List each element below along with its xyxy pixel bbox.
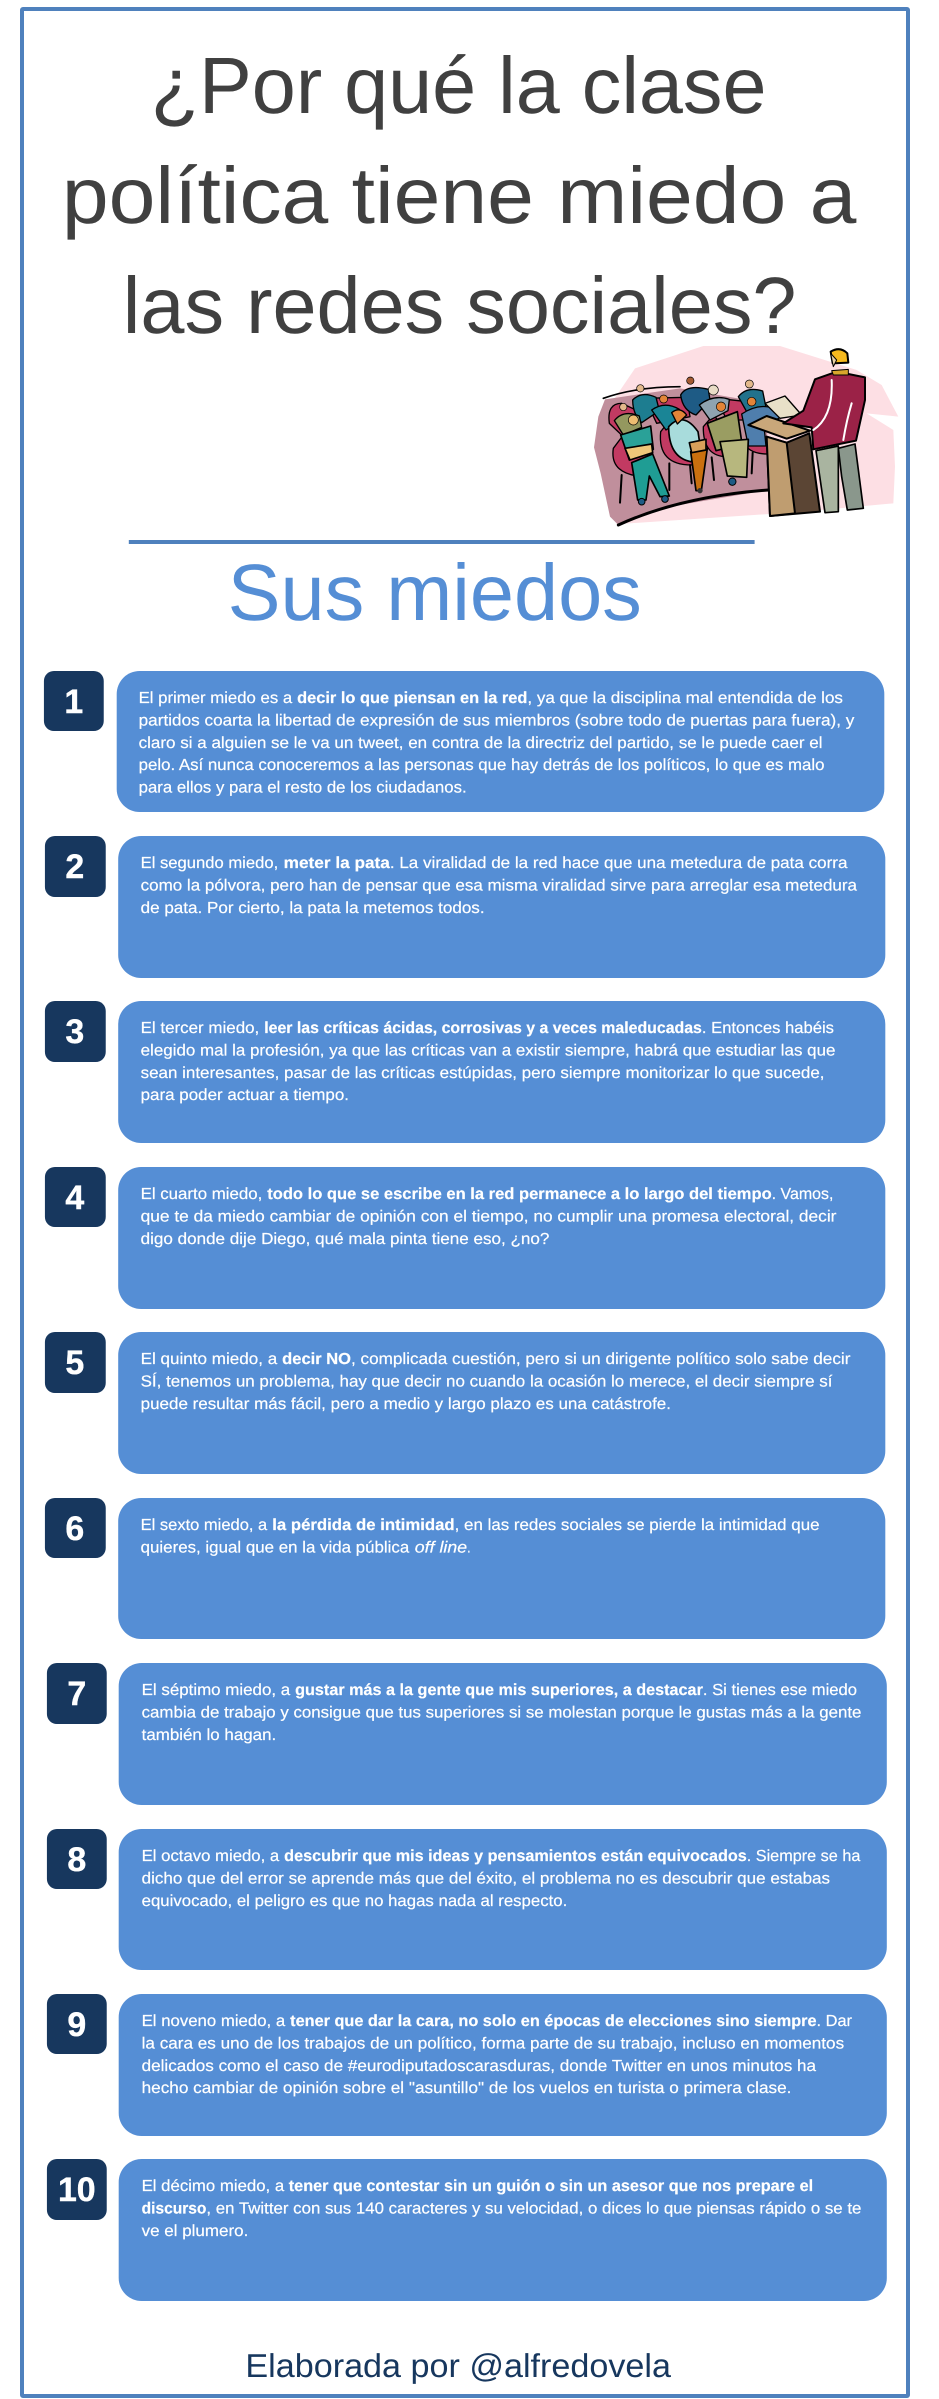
badge 1	[44, 671, 104, 731]
card 7: cambia de trabajo y consigue que tus superiores si se molestan porque le gustas más a la gente	[142, 1704, 861, 1721]
badge 10	[47, 2159, 107, 2220]
card 9: delicados como el caso de #eurodiputadoscarasduras, donde Twitter en unos minutos ha	[142, 2058, 816, 2075]
card 10: , en Twitter con sus 140 caracteres y su velocidad, o dices lo que piensas rápido o se te	[206, 2200, 861, 2217]
badge 5: 5	[65, 1344, 84, 1382]
card 6: off line	[415, 1539, 467, 1556]
badge 8: 8	[67, 1841, 86, 1879]
card 9	[119, 1994, 887, 2136]
card 10: El décimo miedo, a	[142, 2178, 284, 2195]
heading: Sus miedos: Sus miedos	[228, 548, 642, 637]
lectern	[748, 416, 820, 516]
card 6: la pérdida de intimidad	[272, 1517, 455, 1534]
speaker	[783, 349, 865, 513]
card 2: . La viralidad de la red hace que una metedura de pata corra	[390, 855, 848, 872]
title: las redes sociales?	[123, 261, 797, 350]
card 3: para poder actuar a tiempo.	[141, 1087, 349, 1104]
card 7: gustar más a la gente que mis superiores, a destacar	[295, 1682, 703, 1699]
card 4: todo lo que se escribe en la red permanece a lo largo del tiempo	[267, 1186, 772, 1203]
footer credit: Elaborada por @alfredovela	[245, 2347, 672, 2384]
card 2: de pata. Por cierto, la pata la metemos todos.	[141, 900, 485, 917]
card 7: . Si tienes ese miedo	[703, 1682, 857, 1699]
card 1: , ya que la disciplina mal entendida de los	[527, 690, 843, 707]
card 8: El octavo miedo, a	[142, 1848, 279, 1865]
card 1: para ellos y para el resto de los ciudadanos.	[139, 780, 467, 797]
card 1: partidos coarta la libertad de expresión de sus miembros (sobre todo de puertas para fuera), y	[139, 712, 854, 729]
card 7	[119, 1663, 887, 1805]
miedo 3	[45, 1001, 885, 1143]
card 3: elegido mal la profesión, ya que las críticas van a existir siempre, habrá que estudiar las que	[141, 1042, 836, 1059]
card 4: . Vamos,	[772, 1186, 833, 1203]
badge 2	[45, 836, 106, 897]
card 2: El segundo miedo,	[141, 855, 278, 872]
badge 5	[45, 1332, 106, 1393]
card 7: también lo hagan.	[142, 1727, 276, 1744]
miedo 9	[47, 1994, 887, 2136]
card 8: descubrir que mis ideas y pensamientos están equivocados	[284, 1848, 747, 1865]
miedo 6	[45, 1498, 885, 1639]
card 6: El sexto miedo, a	[141, 1517, 267, 1534]
card 3: sean interesantes, pasar de las críticas estúpidas, pero siempre monitorizar lo que sucede,	[141, 1065, 824, 1082]
miedo 4	[45, 1167, 885, 1309]
badge 3: 3	[65, 1013, 84, 1051]
badge 10: 10	[58, 2171, 96, 2209]
badge 8	[47, 1829, 107, 1889]
back row	[614, 388, 781, 446]
badge 1: 1	[64, 683, 83, 721]
badge 4	[45, 1167, 106, 1227]
miedo 5	[45, 1332, 885, 1474]
badge 9: 9	[67, 2006, 86, 2044]
card 2	[118, 836, 885, 978]
badge 2: 2	[65, 848, 84, 886]
card 5: SÍ, tenemos un problema, hay que decir no cuando la ocasión lo merece, el decir siempre sí	[141, 1372, 833, 1390]
card 4	[118, 1167, 885, 1309]
card 7: El séptimo miedo, a	[142, 1682, 290, 1699]
card 8: equivocado, el peligro es que no hagas nada al respecto.	[142, 1893, 567, 1910]
card 3	[118, 1001, 885, 1143]
card 5: decir NO	[282, 1351, 351, 1368]
card 3: El tercer miedo,	[141, 1020, 259, 1037]
card 9: la cara es uno de los trabajos de un político, forma parte de su trabajo, incluso en momentos	[142, 2035, 844, 2052]
badge 9	[47, 1994, 107, 2054]
card 9: hecho cambiar de opinión sobre el "asuntillo" de los vuelos en turista o primera clase.	[142, 2080, 791, 2097]
icon: speaker at a lectern addressing a seated audience	[594, 346, 898, 525]
front row	[621, 412, 748, 500]
card 9: El noveno miedo, a	[142, 2013, 285, 2030]
title	[62, 41, 857, 350]
card 5: , complicada cuestión, pero si un dirigente político solo sabe decir	[351, 1351, 851, 1368]
paper	[765, 396, 802, 418]
seats	[609, 397, 768, 477]
miedo 1	[44, 671, 884, 812]
badge 7: 7	[67, 1675, 86, 1713]
card 5: puede resultar más fácil, pero a medio y largo plazo es una catástrofe.	[141, 1396, 671, 1413]
card 6	[118, 1498, 885, 1639]
miedo 8	[47, 1829, 887, 1970]
card 10: discurso	[142, 2200, 207, 2217]
divider rule	[129, 540, 755, 544]
card 4: digo donde dije Diego, qué mala pinta tiene eso, ¿no?	[141, 1231, 549, 1248]
card 3: . Entonces habéis	[702, 1020, 834, 1037]
card 8: dicho que del error se aprende más que del éxito, el problema no es descubrir que estabas	[142, 1870, 830, 1887]
title: política tiene miedo a	[62, 151, 857, 240]
card 2: meter la pata	[284, 855, 390, 872]
list of miedos	[44, 671, 887, 2301]
card 8	[119, 1829, 887, 1970]
badge 3	[45, 1001, 106, 1062]
card 1: El primer miedo es a	[139, 690, 292, 707]
card 8: . Siempre se ha	[747, 1848, 860, 1865]
card 1: decir lo que piensan en la red	[297, 690, 527, 707]
card 5: El quinto miedo, a	[141, 1351, 277, 1368]
heads	[620, 377, 756, 425]
card 1: claro si a alguien se le va un tweet, en contra de la directriz del partido, se le puede caer el	[139, 735, 823, 752]
card 1: pelo. Así nunca conoceremos a las personas que hay detrás de los políticos, lo que es malo	[139, 757, 825, 774]
badge 7	[47, 1663, 107, 1724]
card 4: que te da miedo cambiar de opinión con el tiempo, no cumplir una promesa electoral, decir	[141, 1208, 837, 1225]
badge 6	[45, 1498, 106, 1558]
card 9: tener que dar la cara, no solo en épocas de elecciones sino siempre	[290, 2013, 817, 2030]
card 10: ve el plumero.	[142, 2223, 248, 2240]
card 10: tener que contestar sin un guión o sin un asesor que nos prepare el	[289, 2178, 813, 2195]
miedo 7	[47, 1663, 887, 1805]
card 6: , en las redes sociales se pierde la intimidad que	[455, 1517, 820, 1534]
badge 6: 6	[65, 1510, 84, 1548]
card 6: .	[467, 1539, 471, 1556]
card 10	[119, 2159, 887, 2301]
miedo 2	[45, 836, 885, 978]
card 4: El cuarto miedo,	[141, 1186, 262, 1203]
card 9: . Dar	[817, 2013, 853, 2030]
card 5	[118, 1332, 885, 1474]
badge 4: 4	[65, 1179, 84, 1217]
card 6: quieres, igual que en la vida pública	[141, 1539, 409, 1556]
title: ¿Por qué la clase	[151, 41, 766, 130]
miedo 10	[47, 2159, 887, 2301]
card 2: como la pólvora, pero han de pensar que esa misma viralidad sirve para arreglar esa metedura	[141, 877, 857, 894]
card 3: leer las críticas ácidas, corrosivas y a veces maleducadas	[264, 1020, 702, 1037]
card 1	[117, 671, 884, 812]
